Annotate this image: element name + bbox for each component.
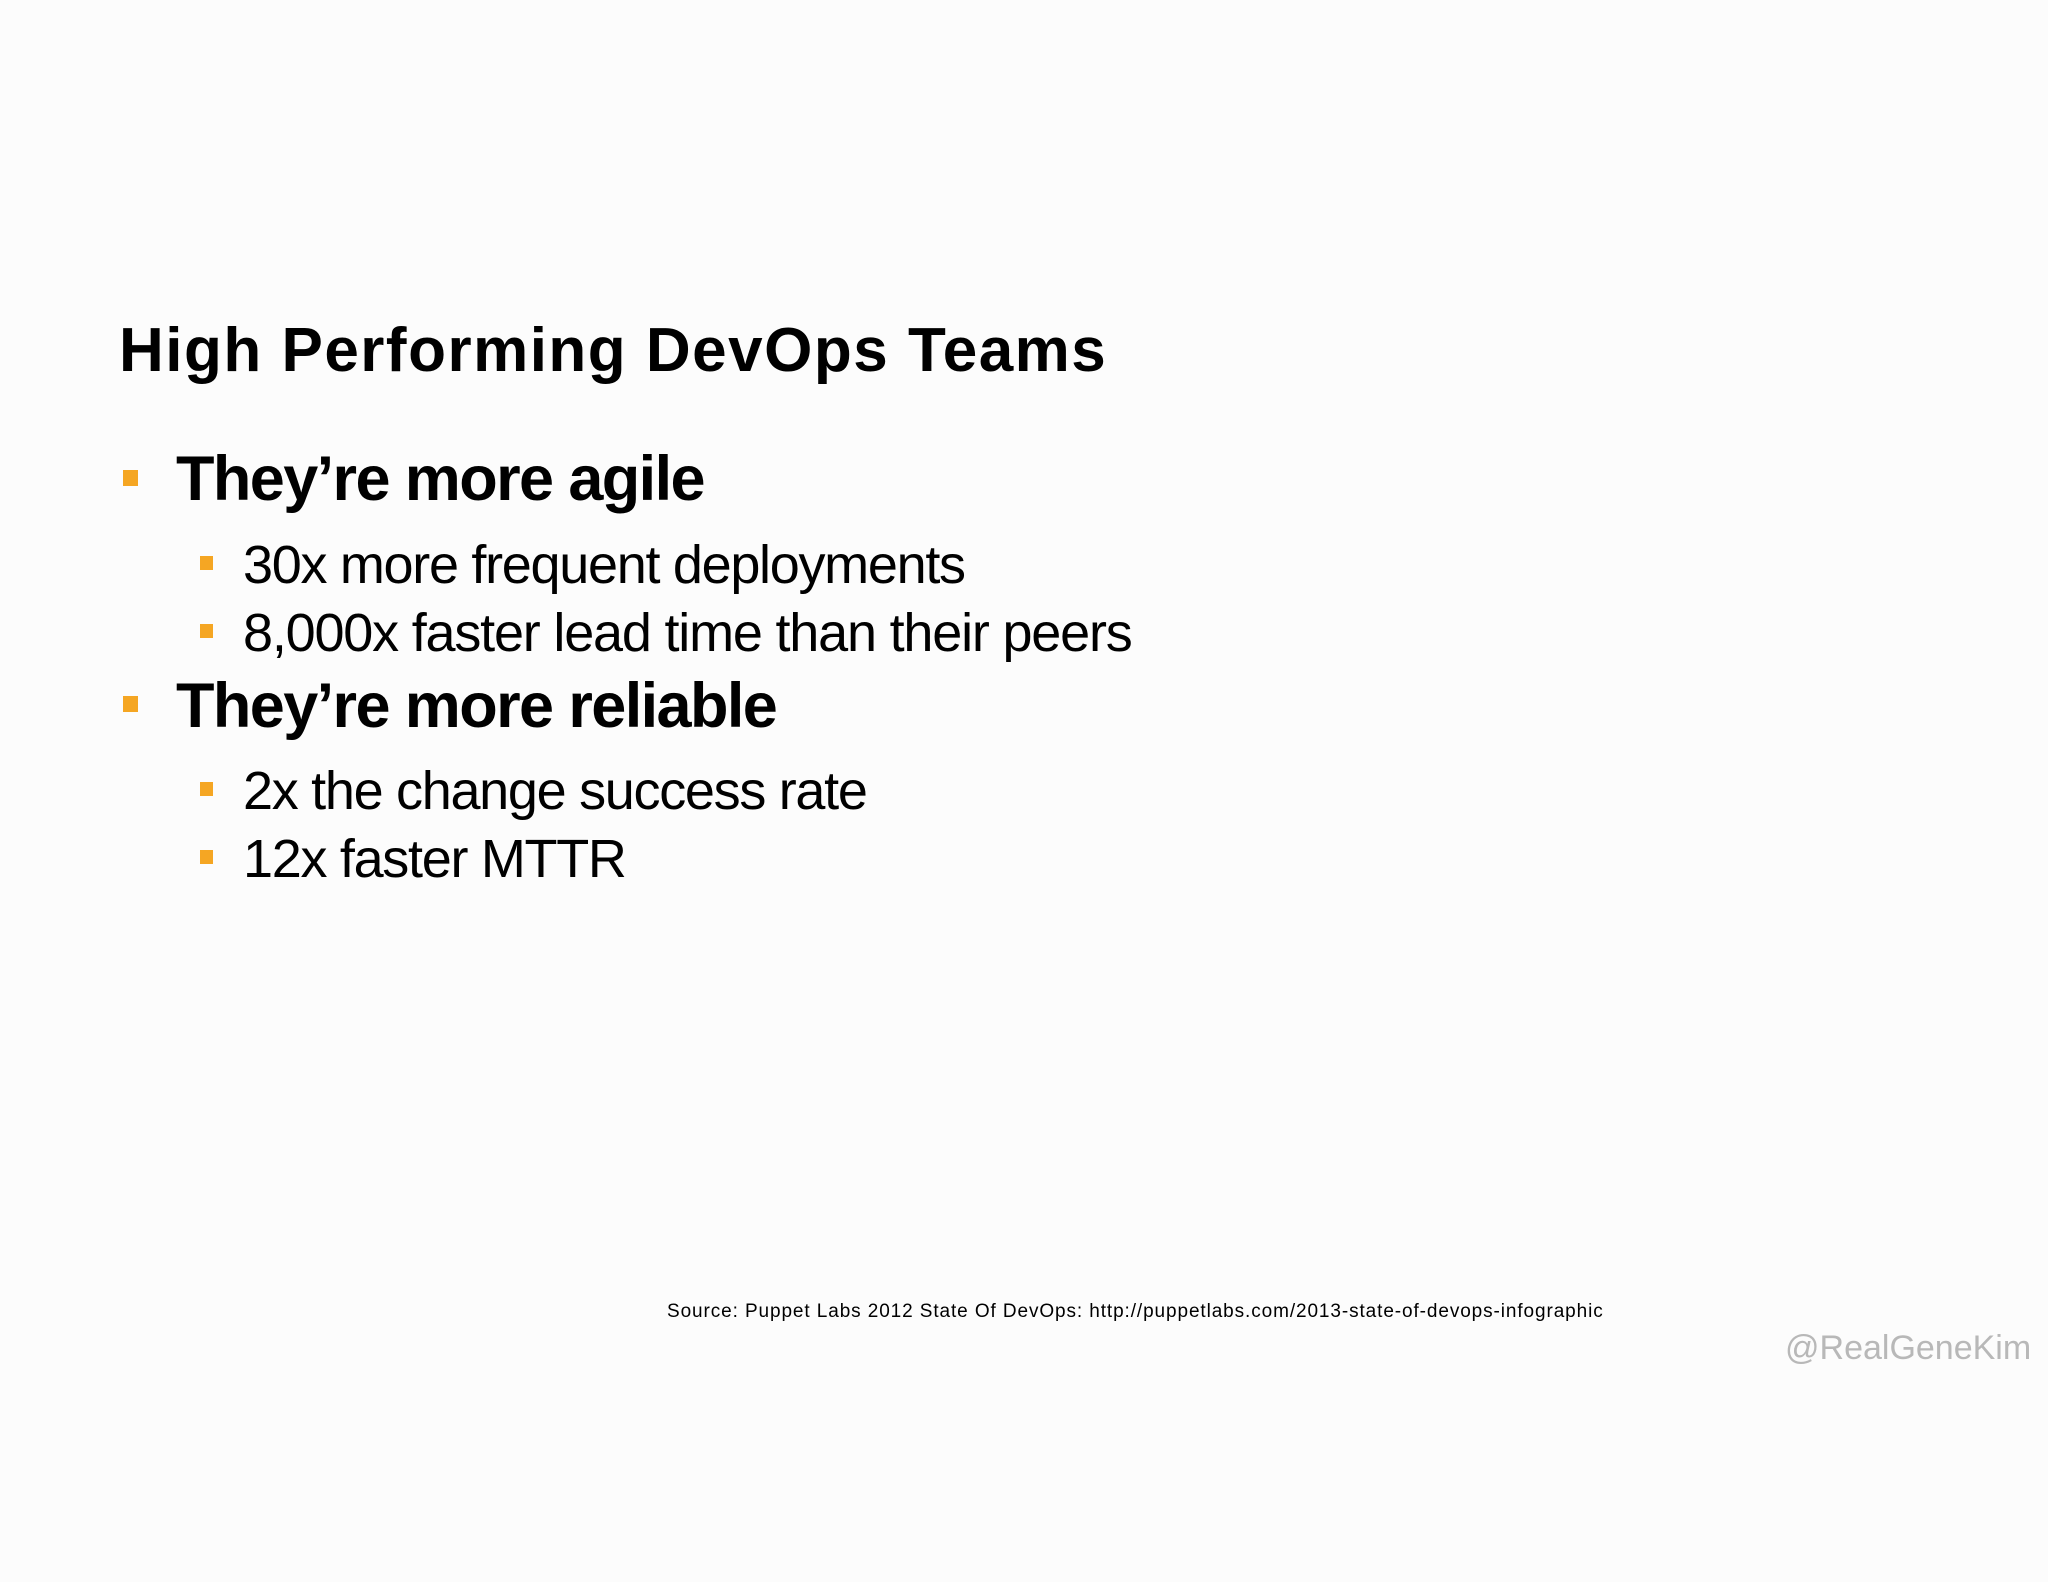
icon: small orange square (200, 782, 213, 796)
icon: small orange square (200, 624, 213, 638)
title: High Performing DevOps Teams (119, 316, 1107, 385)
sub bullet: lead time: 8,000x faster lead time than their peers (243, 603, 1132, 663)
icon: small orange square (200, 850, 213, 864)
sub bullet: MTTR: 12x faster MTTR (243, 829, 626, 889)
bullet: agile: They’re more agile (176, 444, 704, 514)
icon: orange bullet square (123, 470, 138, 486)
icon: small orange square (200, 556, 213, 570)
sub bullet: change success: 2x the change success rate (243, 761, 867, 821)
icon: orange bullet square (123, 696, 138, 712)
watermark handle: @RealGeneKim (1785, 1329, 2031, 1367)
bullet: reliable: They’re more reliable (176, 671, 776, 741)
source note: Source: Puppet Labs 2012 State Of DevOps: http://puppetlabs.com/2013-state-of-devops-infographic (667, 1301, 1604, 1322)
sub bullet: deployments: 30x more frequent deployments (243, 535, 965, 595)
